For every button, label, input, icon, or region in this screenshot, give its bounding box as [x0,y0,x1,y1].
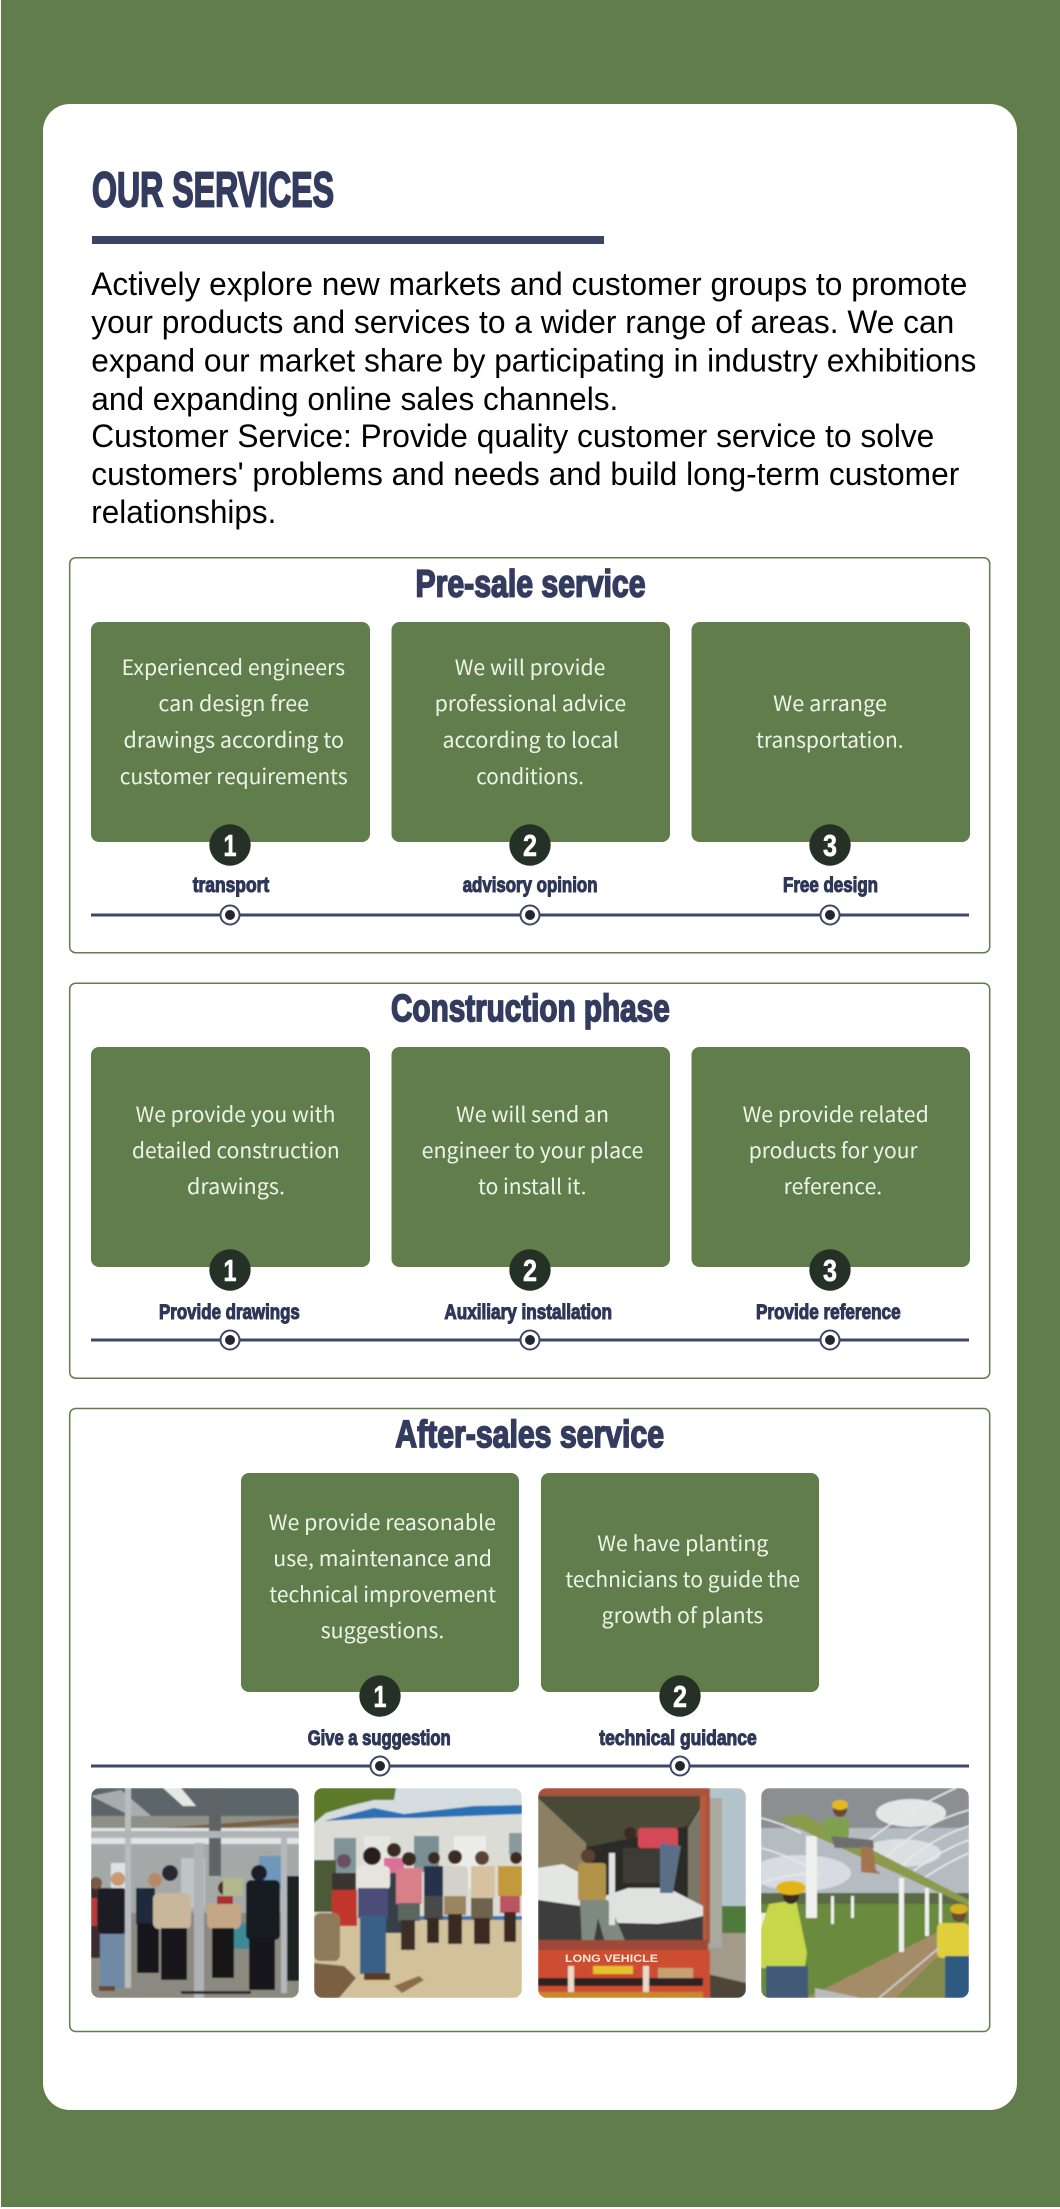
card 1: construction drawings: detailed construction [132,1135,340,1165]
number badge 3 [809,824,851,866]
intro text block: and expanding online sales channels. [91,381,618,417]
label: provide drawings: Provide drawings [159,1301,300,1324]
truck lettering: LONG VEHICLE [565,1953,658,1965]
photo: visitors inside steel-frame workshop [90,1788,299,1998]
number badge 3: 3 [823,828,837,863]
photo: group standing outside white building [314,1788,522,1998]
timeline [91,1330,969,1350]
card 3: related products: products for your [749,1135,919,1165]
intro text block: Actively explore new markets and customer groups to promote [91,266,967,302]
number badge 2 [509,1249,551,1291]
card 3: transportation: transportation. [756,724,904,754]
label: free design: Free design [783,874,878,897]
panel: construction phase [70,983,990,1378]
card 1: suggestions: We provide reasonable [269,1507,496,1537]
panel: after-sales service [70,1408,990,2032]
card 1: free drawings: Experienced engineers [122,652,345,682]
label: give a suggestion: Give a suggestion [308,1727,451,1750]
heading: pre-sale service: Pre-sale service [416,564,646,606]
card 3: related products: reference. [784,1171,882,1201]
number badge 3: 3 [823,1253,837,1288]
card 2: professional advice: professional advice [435,688,626,718]
intro text block: your products and services to a wider range of areas. We can [91,304,954,340]
number badge 2: 2 [673,1679,687,1714]
photo: workers building greenhouse frame [751,1788,969,1998]
card 2: engineer visit: to install it. [478,1171,586,1201]
card 2: professional advice [392,622,670,842]
card 1: free drawings: can design free [158,688,309,718]
card 3: transportation: We arrange [773,688,887,718]
intro text block [91,266,976,530]
card 2: planting technicians [541,1473,819,1692]
card 1: free drawings [91,622,370,842]
intro text block: expand our market share by participating in industry exhibitions [91,343,976,379]
label: technical guidance: technical guidance [599,1727,757,1750]
card 1: suggestions: suggestions. [321,1615,444,1645]
card 1: suggestions: technical improvement [269,1579,496,1609]
card 1: construction drawings [91,1047,370,1267]
number badge 1: 1 [224,828,236,863]
card 3: transportation [692,622,970,842]
heading: after-sales service: After-sales service [395,1414,664,1456]
number badge 2: 2 [523,828,537,863]
number badge 1: 1 [224,1253,236,1288]
photo: workers unloading container truck [538,1788,746,1998]
number badge 2 [659,1675,701,1717]
card 2: professional advice: according to local [442,724,619,754]
label: advisory opinion: advisory opinion [463,874,598,897]
timeline [91,1756,969,1776]
panel: pre-sale service [70,558,990,953]
card 1: construction drawings: drawings. [187,1171,285,1201]
card 2: planting technicians: growth of plants [602,1600,763,1630]
title: our services: OUR SERVICES [92,164,334,218]
card 1: free drawings: customer requirements [120,761,348,791]
number badge 3 [809,1249,851,1291]
card 3: related products: We provide related [743,1099,929,1129]
label: provide reference: Provide reference [756,1301,901,1324]
card 1: free drawings: drawings according to [124,724,344,754]
label: transport: transport [193,874,269,897]
intro text block: Customer Service: Provide quality customer service to solve [91,418,934,454]
heading: construction phase: Construction phase [391,988,670,1030]
card 2: engineer visit [392,1047,670,1267]
card 2: planting technicians: technicians to guide the [565,1564,800,1594]
intro text block: relationships. [91,494,276,530]
card 3: related products [692,1047,970,1267]
card 1: suggestions: use, maintenance and [273,1543,492,1573]
timeline [91,906,969,924]
card 2: engineer visit: We will send an [456,1099,609,1129]
title underline [92,236,604,244]
card 2: planting technicians: We have planting [597,1528,768,1558]
card 2: professional advice: conditions. [476,761,584,791]
label: auxiliary installation: Auxiliary installation [444,1301,612,1324]
card 2: professional advice: We will provide [455,652,605,682]
number badge 1 [209,1249,251,1291]
card 1: construction drawings: We provide you with [136,1099,335,1129]
number badge 1 [209,824,251,866]
number badge 2 [509,824,551,866]
number badge 1: 1 [374,1679,386,1714]
number badge 1 [359,1675,401,1717]
intro text block: customers' problems and needs and build long-term customer [91,456,960,492]
card 2: engineer visit: engineer to your place [422,1135,643,1165]
card 1: suggestions [241,1473,519,1692]
number badge 2: 2 [523,1253,537,1288]
